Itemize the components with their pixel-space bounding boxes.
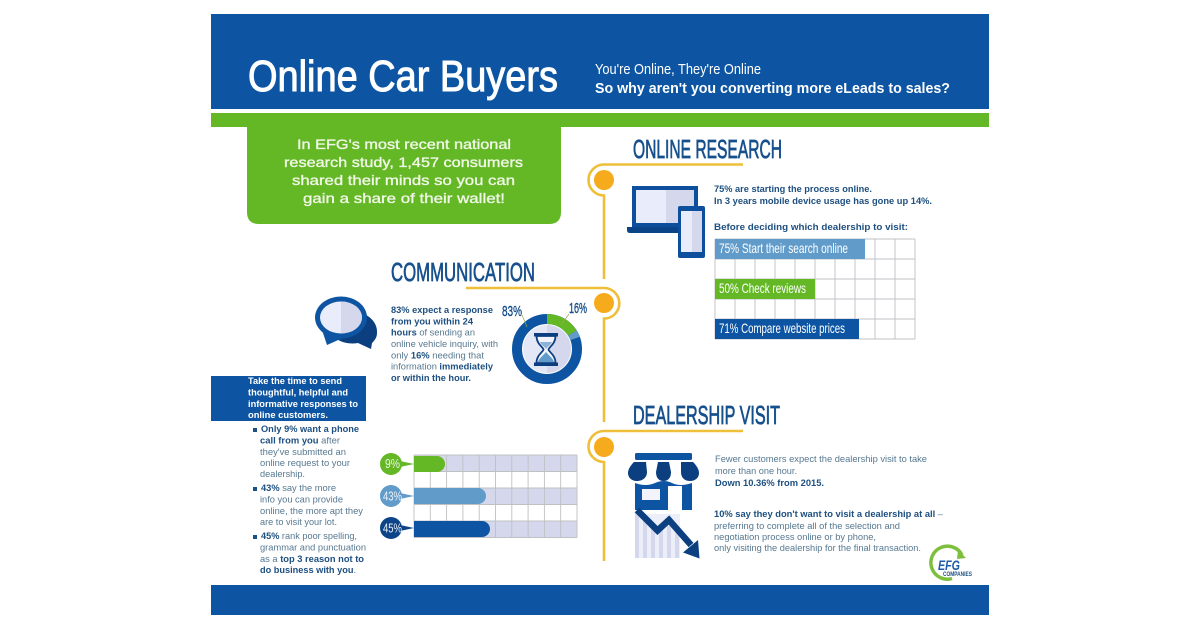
text: communication: hours of sending an	[391, 327, 475, 338]
panel: study intro: In EFG's most recent national	[297, 136, 511, 152]
text: online research stats: Before deciding which dealership to visit:	[714, 221, 908, 232]
label: 83 percent: 83%	[502, 303, 522, 320]
text: online research stats: 75% are starting the process online.	[714, 183, 872, 194]
title: Online Car Buyers	[248, 52, 558, 101]
text: dealership visit: more than one hour.	[715, 465, 797, 476]
text: communication	[391, 304, 498, 383]
bar: compare website prices	[715, 319, 859, 339]
green band	[211, 113, 989, 127]
bar: 9 percent	[380, 453, 445, 475]
chart: dealership decision bars	[715, 239, 915, 339]
icon: laptop and tablet	[627, 186, 705, 258]
bullet list: phone call, info, spelling: 45% rank poor spelling,	[261, 530, 357, 541]
text: communication: 83% expect a response	[391, 304, 493, 315]
text: communication: information immediately	[391, 361, 494, 372]
timeline connector: online research	[588, 164, 743, 279]
icon: storefront with falling arrow	[628, 453, 700, 558]
panel: study intro	[247, 127, 561, 224]
header banner	[211, 14, 989, 109]
subtitle: So why aren't you converting more eLeads to sales?	[595, 80, 950, 97]
bar: 43 percent	[380, 485, 486, 507]
callout: take the time: Take the time to send	[248, 376, 342, 387]
label: 16 percent: 16%	[569, 300, 587, 317]
panel: study intro: research study, 1,457 consumers	[284, 154, 523, 170]
bullet list: phone call, info, spelling: online, the more apt they	[260, 505, 363, 516]
bar: start their search online: 75% Start their search online	[719, 240, 848, 256]
bar: 43 percent: 43%	[383, 488, 402, 504]
chart: percent bars	[380, 453, 577, 539]
text: communication: online vehicle inquiry, with	[391, 338, 498, 349]
heading: dealership visit: DEALERSHIP VISIT	[633, 400, 780, 430]
icon: hourglass	[534, 333, 558, 366]
bullet list: phone call, info, spelling: Only 9% want a phone	[261, 423, 359, 434]
bullet list: phone call, info, spelling: do business with you.	[260, 564, 356, 575]
logo: EFG Companies: COMPANIES	[943, 572, 972, 578]
chart: response time donut	[502, 300, 587, 379]
bullet list: phone call, info, spelling: grammar and punctuation	[260, 542, 366, 552]
bar: 9 percent: 9%	[385, 456, 400, 471]
callout: take the time: informative responses to	[248, 399, 358, 410]
text: communication: or within the hour.	[391, 372, 471, 383]
text: dealership visit: only visiting the dealership for the final transaction.	[714, 542, 921, 553]
heading: communication: COMMUNICATION	[391, 257, 535, 287]
text: online research stats	[714, 183, 932, 232]
panel: study intro: gain a share of their wallet!	[303, 190, 505, 206]
callout: take the time: online customers.	[248, 410, 328, 421]
text: communication: only 16% needing that	[391, 349, 484, 360]
text: dealership visit: Fewer customers expect the dealership visit to take	[715, 453, 927, 464]
callout: take the time	[211, 376, 366, 421]
bullet list: phone call, info, spelling: info you can provide	[260, 494, 343, 504]
bullet list: phone call, info, spelling: online request to your	[260, 457, 350, 468]
text: online research stats: In 3 years mobile device usage has gone up 14%.	[714, 195, 932, 206]
bullet list: phone call, info, spelling: as a top 3 reason not to	[260, 553, 364, 564]
footer band	[211, 585, 989, 615]
logo: EFG Companies: EFG	[938, 557, 960, 573]
panel: study intro: shared their minds so you can	[292, 172, 515, 188]
text: communication: from you within 24	[391, 315, 474, 326]
text: dealership visit: 10% say they don't want to visit a dealership at all –	[714, 508, 944, 519]
logo: EFG Companies	[931, 546, 972, 579]
timeline connector: communication	[466, 288, 619, 422]
text: dealership visit: negotiation process online or by phone,	[714, 531, 876, 542]
text: dealership visit: Down 10.36% from 2015.	[715, 477, 824, 488]
bullet list: phone call, info, spelling: they've submitted an	[260, 446, 346, 457]
subtitle: You're Online, They're Online	[595, 61, 761, 78]
bar: 45 percent: 45%	[383, 520, 402, 536]
bullet list: phone call, info, spelling: 43% say the more	[261, 482, 336, 493]
icon: chat bubbles	[315, 296, 377, 349]
bullet list: phone call, info, spelling	[253, 423, 366, 575]
bar: check reviews	[715, 279, 815, 299]
subtitle	[595, 61, 950, 97]
heading: online research: ONLINE RESEARCH	[633, 134, 782, 164]
callout: take the time: thoughtful, helpful and	[248, 388, 348, 398]
bar: compare website prices: 71% Compare website prices	[719, 320, 845, 336]
bullet list: phone call, info, spelling: dealership.	[260, 468, 305, 479]
text: dealership visit: preferring to complete all of the selection and	[714, 520, 900, 531]
bar: 45 percent	[380, 517, 490, 539]
bar: start their search online	[715, 239, 865, 259]
bullet list: phone call, info, spelling: are to visit your lot.	[260, 516, 337, 527]
bullet list: phone call, info, spelling: call from you after	[260, 434, 340, 446]
text: dealership visit	[714, 453, 944, 553]
bar: check reviews: 50% Check reviews	[719, 280, 806, 296]
timeline connector: dealership visit	[588, 431, 743, 561]
